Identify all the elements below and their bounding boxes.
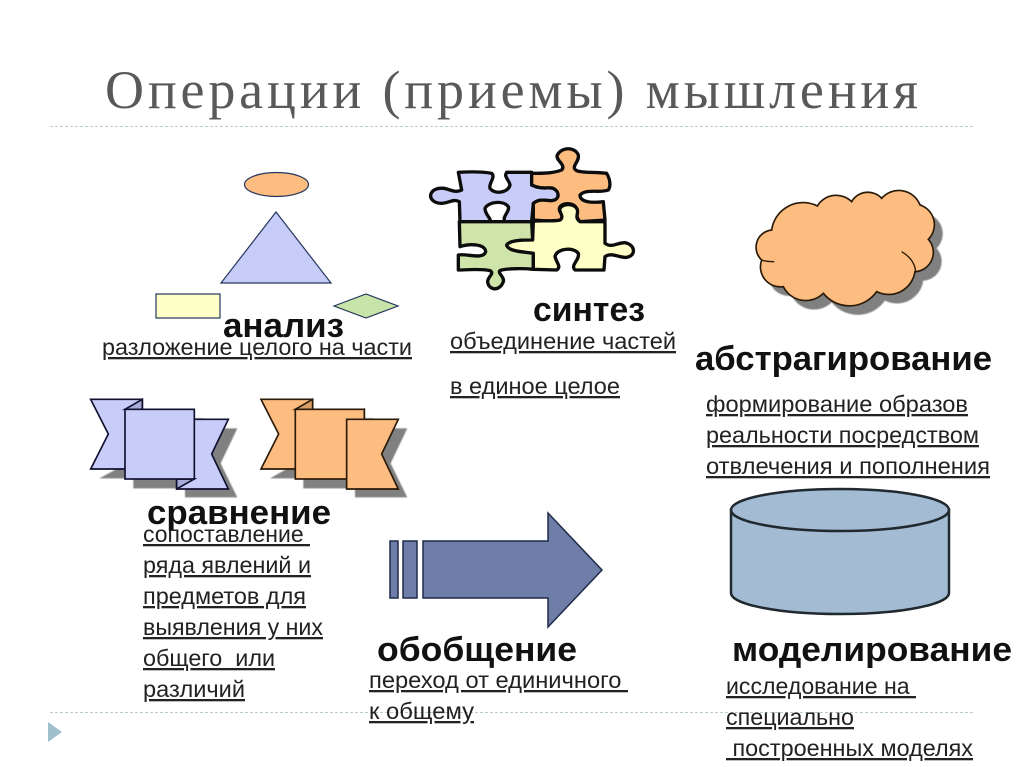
icon: cloud xyxy=(756,190,943,315)
text: comparison description: сопоставление xyxy=(143,521,310,547)
text: synthesis description xyxy=(450,328,676,399)
text: comparison description: выявления у них xyxy=(143,614,323,640)
title: Операции (приемы) мышления xyxy=(105,60,918,120)
icon: cylinder xyxy=(731,489,949,614)
text: synthesis description: объединение частей xyxy=(450,328,676,354)
heading: synthesis: синтез xyxy=(533,291,645,329)
text: comparison description: ряда явлений и xyxy=(143,552,311,578)
text: synthesis description: в единое целое xyxy=(450,373,620,399)
text: comparison description: различий xyxy=(143,676,245,702)
text: generalization description xyxy=(369,667,628,724)
panel: comparison xyxy=(91,399,407,702)
heading: analysis: анализ xyxy=(223,307,344,345)
heading: generalization: обобщение xyxy=(377,631,577,669)
text: abstraction description: отвлечения и пополнения xyxy=(706,453,990,479)
text: abstraction description: формирование образов xyxy=(706,391,968,417)
panel: analysis xyxy=(102,172,412,360)
text: modeling description: специально xyxy=(726,704,854,730)
text: generalization description: переход от единичного xyxy=(369,667,628,693)
icon: slide marker triangle xyxy=(48,722,62,742)
panel: synthesis xyxy=(431,149,676,399)
icon: blue ribbons xyxy=(91,399,237,497)
heading: abstraction: абстрагирование xyxy=(695,340,992,378)
icon: puzzle xyxy=(431,149,633,289)
panel: generalization xyxy=(369,513,628,724)
text: comparison description xyxy=(143,521,323,702)
text: comparison description: предметов для xyxy=(143,583,306,609)
panel: abstraction xyxy=(695,190,992,479)
icon: analysis shapes xyxy=(156,172,398,318)
panel: modeling xyxy=(726,489,1012,761)
text: abstraction description xyxy=(706,391,990,479)
text: abstraction description: реальности посредством xyxy=(706,422,979,448)
text: generalization description: к общему xyxy=(369,698,475,724)
text: modeling description xyxy=(726,673,974,761)
text: comparison description: общего или xyxy=(143,645,275,671)
text: modeling description: построенных моделях xyxy=(726,735,974,761)
heading: comparison: сравнение xyxy=(147,494,331,532)
text: modeling description: исследование на xyxy=(726,673,916,699)
text: analysis description: разложение целого на части xyxy=(102,334,412,360)
heading: modeling: моделирование xyxy=(732,631,1012,669)
icon: arrow xyxy=(390,513,602,627)
icon: orange ribbons xyxy=(261,399,407,497)
